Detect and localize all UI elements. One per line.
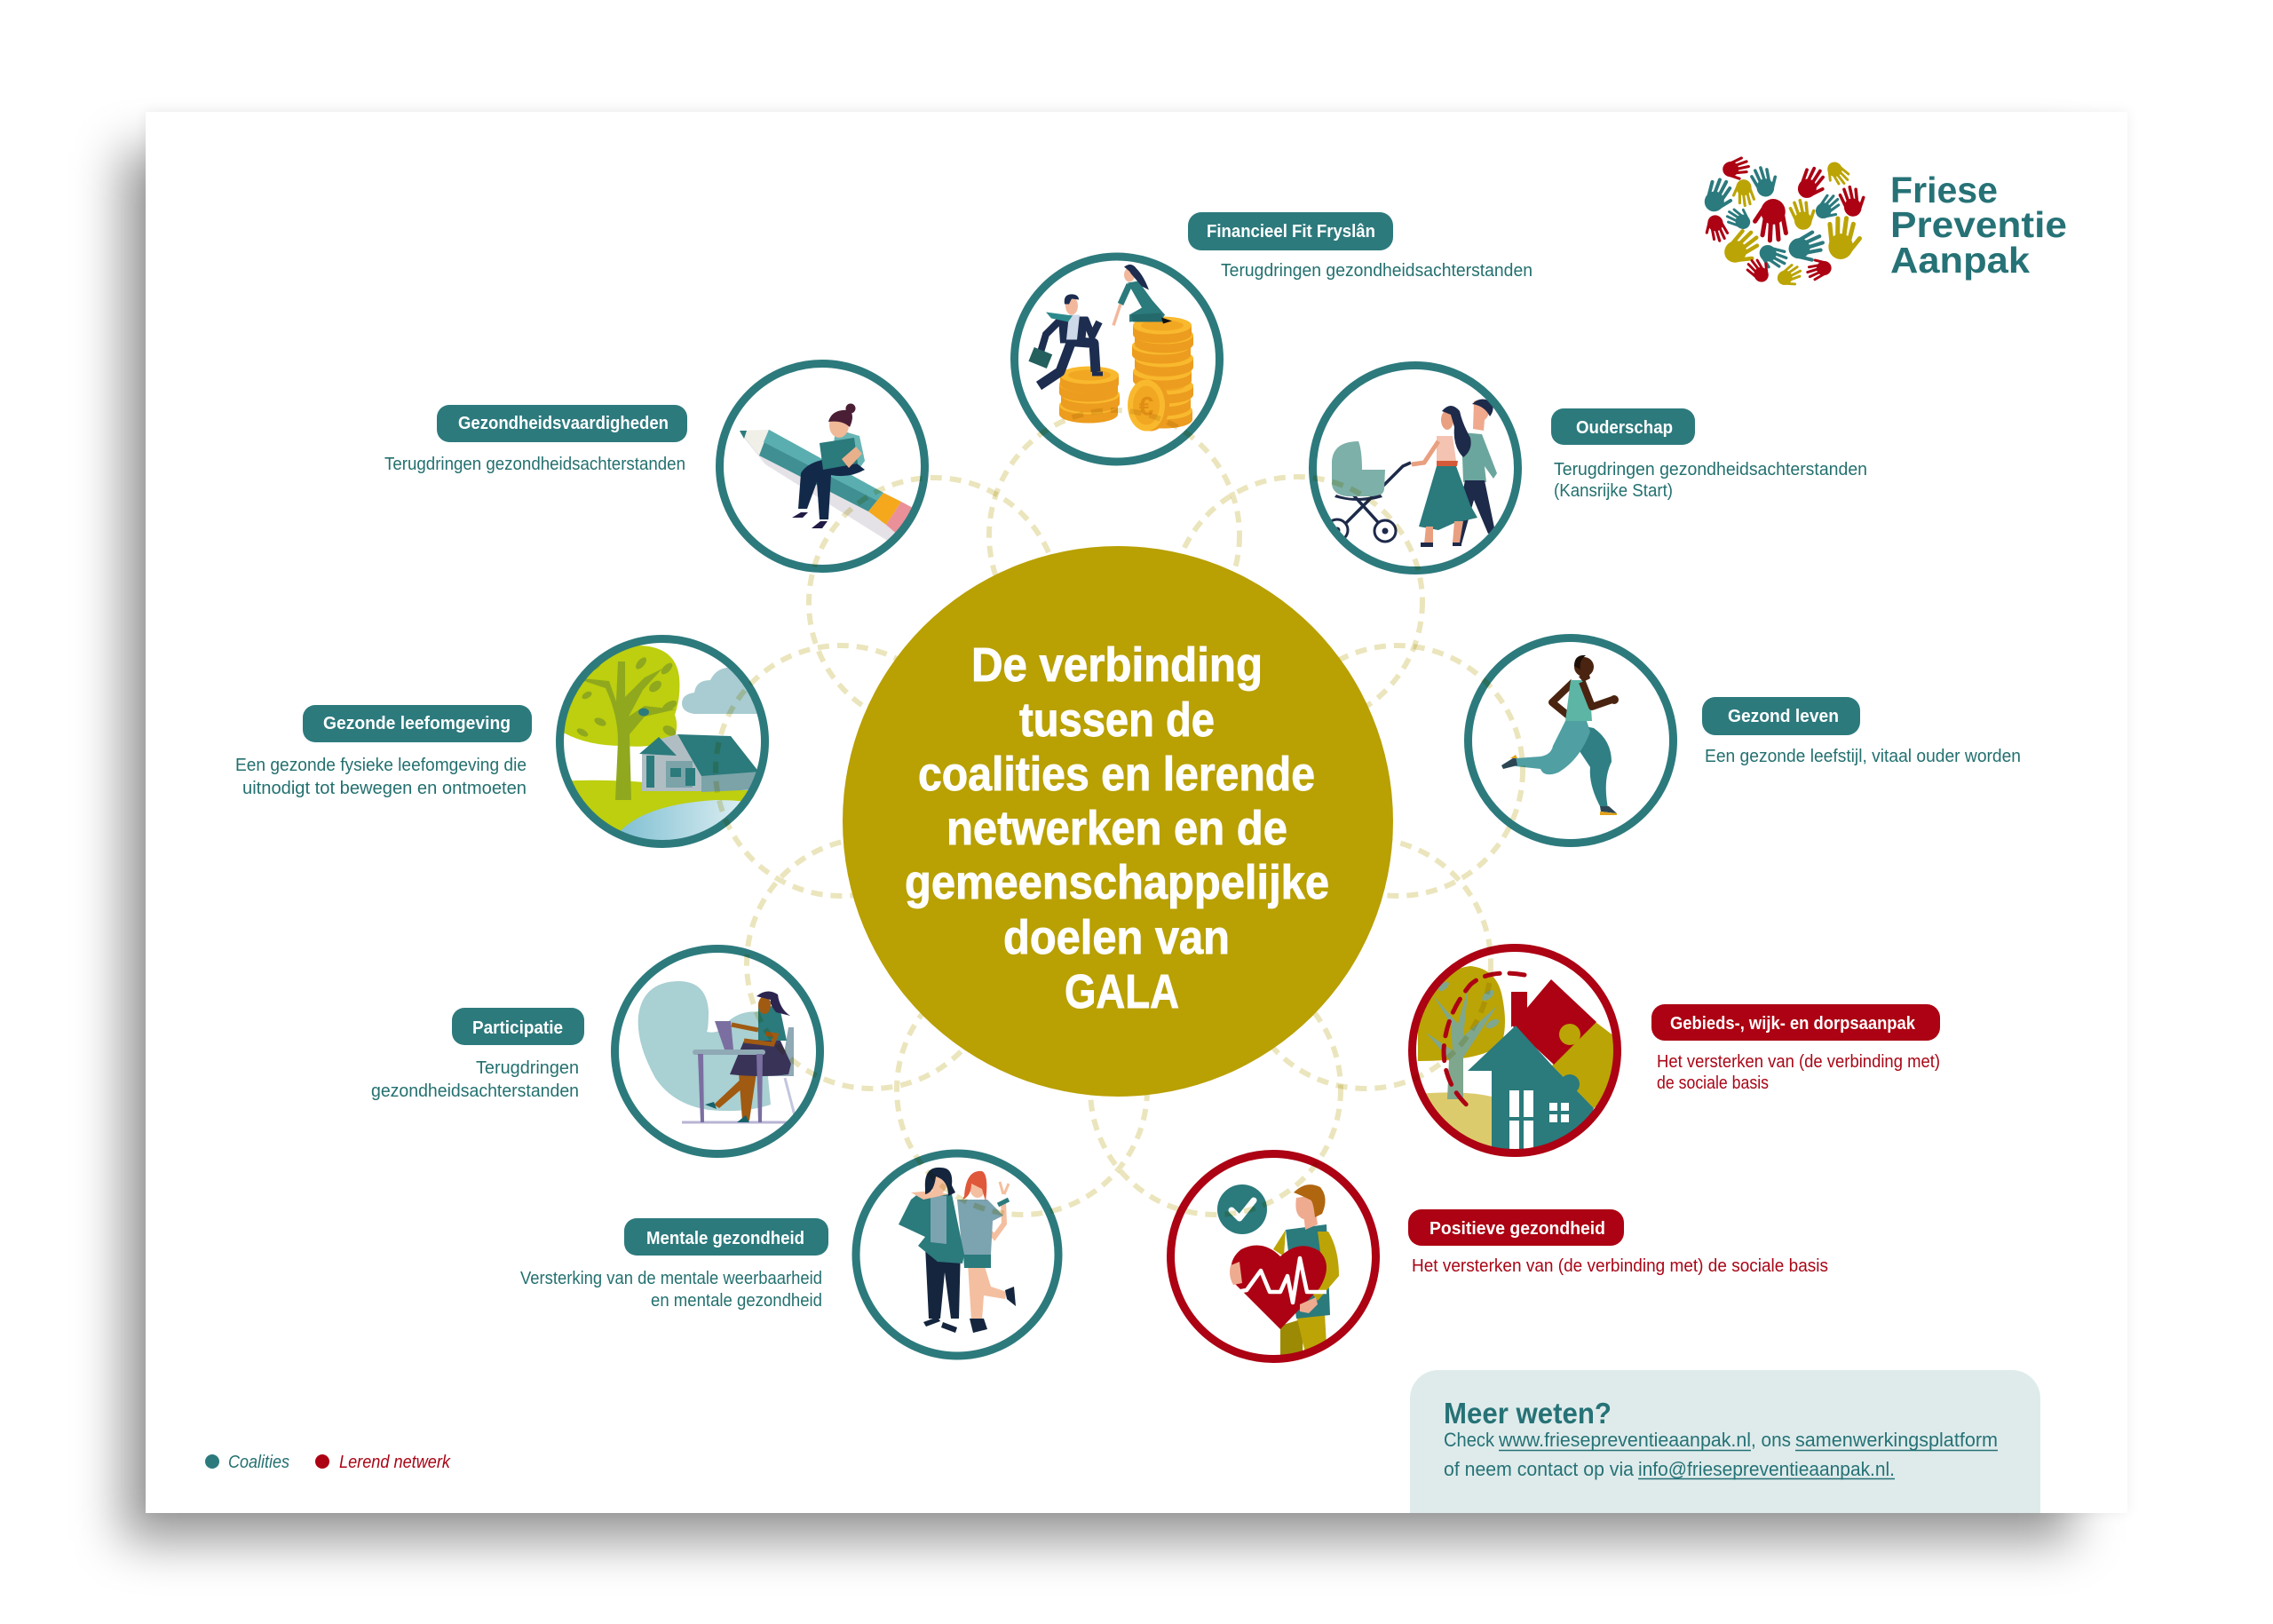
- description: Het versterken van (de verbinding met) de sociale basis: [1412, 1256, 1828, 1276]
- dashed flower petals linking the circles: [716, 410, 1523, 1215]
- panel: Mentale gezondheid: [520, 1152, 1060, 1358]
- heading: Meer weten?: [1444, 1397, 1612, 1430]
- label: Gezond leven: [1702, 697, 1860, 735]
- label: Gezonde leefomgeving: [303, 705, 532, 742]
- panel: Gezond leven: [1468, 638, 2021, 844]
- label: Positieve gezondheid: [1408, 1209, 1624, 1246]
- small circle rings: [559, 257, 1673, 1359]
- description: en mentale gezondheid: [651, 1291, 822, 1311]
- logo: Friese Preventie Aanpak: [1701, 157, 2067, 290]
- title: gemeenschappelijke: [905, 856, 1329, 909]
- panel: Meer weten: [1410, 1370, 2040, 1513]
- label: Financieel Fit Fryslân: Financieel Fit Fryslân: [1207, 222, 1375, 242]
- panel: Ouderschap: [1312, 365, 1867, 571]
- icon: parents with pram: [1332, 400, 1497, 547]
- panel: Positieve gezondheid: [1170, 1153, 1828, 1359]
- icon: two friends: [899, 1167, 1016, 1333]
- label: Financieel Fit Fryslân: [1188, 212, 1393, 250]
- description: Terugdringen: [476, 1058, 579, 1078]
- description: [520, 1269, 822, 1311]
- contact text: info@friesepreventieaanpak.nl.: [1638, 1458, 1895, 1480]
- description: [1657, 1052, 1940, 1093]
- description: uitnodigt tot bewegen en ontmoeten: [242, 779, 527, 798]
- label: Mentale gezondheid: [624, 1218, 828, 1256]
- icon: man holding heart: [1217, 1184, 1339, 1355]
- label: Mentale gezondheid: Mentale gezondheid: [646, 1229, 804, 1248]
- description: Versterking van de mentale weerbaarheid: [520, 1269, 822, 1288]
- panel: Gezonde leefomgeving: [235, 638, 769, 848]
- legend: [205, 1453, 451, 1472]
- contact text: [1444, 1429, 1998, 1480]
- logo wordmark: Aanpak: [1890, 240, 2030, 281]
- contact text: www.friesepreventieaanpak.nl: [1498, 1429, 1751, 1451]
- description: [235, 756, 527, 798]
- logo wordmark: [1890, 170, 2067, 281]
- description: Terugdringen gezondheidsachterstanden: [1221, 261, 1532, 281]
- description: gezondheidsachterstanden: [371, 1081, 579, 1101]
- description: Een gezonde leefstijl, vitaal ouder worden: [1705, 747, 2021, 766]
- legend: Lerend netwerk: [339, 1453, 451, 1472]
- icon: runner: [1501, 655, 1619, 815]
- icon: tree, house and pond: [564, 646, 756, 840]
- panel: Gezondheidsvaardigheden: [384, 363, 925, 569]
- central circle with title: [843, 546, 1393, 1097]
- title: De verbinding: [971, 638, 1263, 692]
- description: Terugdringen gezondheidsachterstanden: [1554, 460, 1867, 479]
- label: Gebieds-, wijk- en dorpsaanpak: [1651, 1004, 1940, 1041]
- label: Gezondheidsvaardigheden: Gezondheidsvaardigheden: [458, 414, 669, 433]
- description: de sociale basis: [1657, 1073, 1769, 1093]
- title: tussen de: [1019, 693, 1215, 747]
- panel: Financieel Fit Fryslân: [1014, 212, 1532, 462]
- label: Gezondheidsvaardigheden: [437, 405, 687, 442]
- icon: business people on coin stacks: €: [1139, 392, 1154, 421]
- label: Ouderschap: Ouderschap: [1576, 418, 1673, 438]
- label: Ouderschap: [1551, 408, 1695, 445]
- contact text: , ons: [1751, 1429, 1791, 1451]
- icon: heart of coloured hands: [1701, 157, 1867, 290]
- icon: woman reading on a pencil: [740, 403, 912, 540]
- logo wordmark: Preventie: [1890, 204, 2067, 245]
- logo wordmark: Friese: [1890, 170, 1998, 210]
- label: Gezond leven: Gezond leven: [1728, 707, 1839, 726]
- description: Terugdringen gezondheidsachterstanden: [384, 455, 685, 474]
- legend: Coalities: [228, 1453, 289, 1472]
- contact text: samenwerkingsplatform: [1795, 1429, 1998, 1451]
- panel: Gebieds-, wijk- en dorpsaanpak: [1408, 947, 1940, 1157]
- label: Participatie: Participatie: [472, 1018, 563, 1038]
- title: GALA: [1065, 965, 1179, 1018]
- icon: business people on coin stacks: [1028, 265, 1193, 432]
- contact text: of neem contact op via: [1444, 1458, 1635, 1480]
- icon: woman at laptop: [638, 981, 796, 1124]
- description: [371, 1058, 579, 1101]
- label: Gebieds-, wijk- en dorpsaanpak: Gebieds-, wijk- en dorpsaanpak: [1670, 1014, 1916, 1034]
- description: (Kansrijke Start): [1554, 481, 1673, 501]
- label: Gezonde leefomgeving: Gezonde leefomgeving: [323, 714, 511, 733]
- contact text: Check: [1444, 1429, 1495, 1451]
- label: Positieve gezondheid: Positieve gezondheid: [1430, 1219, 1605, 1239]
- title: [905, 638, 1329, 1018]
- label: Participatie: [452, 1008, 584, 1045]
- panel: Participatie: [371, 981, 796, 1124]
- description: Het versterken van (de verbinding met): [1657, 1052, 1940, 1072]
- description: [1554, 460, 1867, 501]
- title: coalities en lerende: [918, 748, 1315, 801]
- title: doelen van: [1003, 911, 1230, 964]
- title: netwerken en de: [946, 802, 1287, 855]
- icon: house puzzle and tree: [1418, 966, 1613, 1149]
- description: Een gezonde fysieke leefomgeving die: [235, 756, 527, 775]
